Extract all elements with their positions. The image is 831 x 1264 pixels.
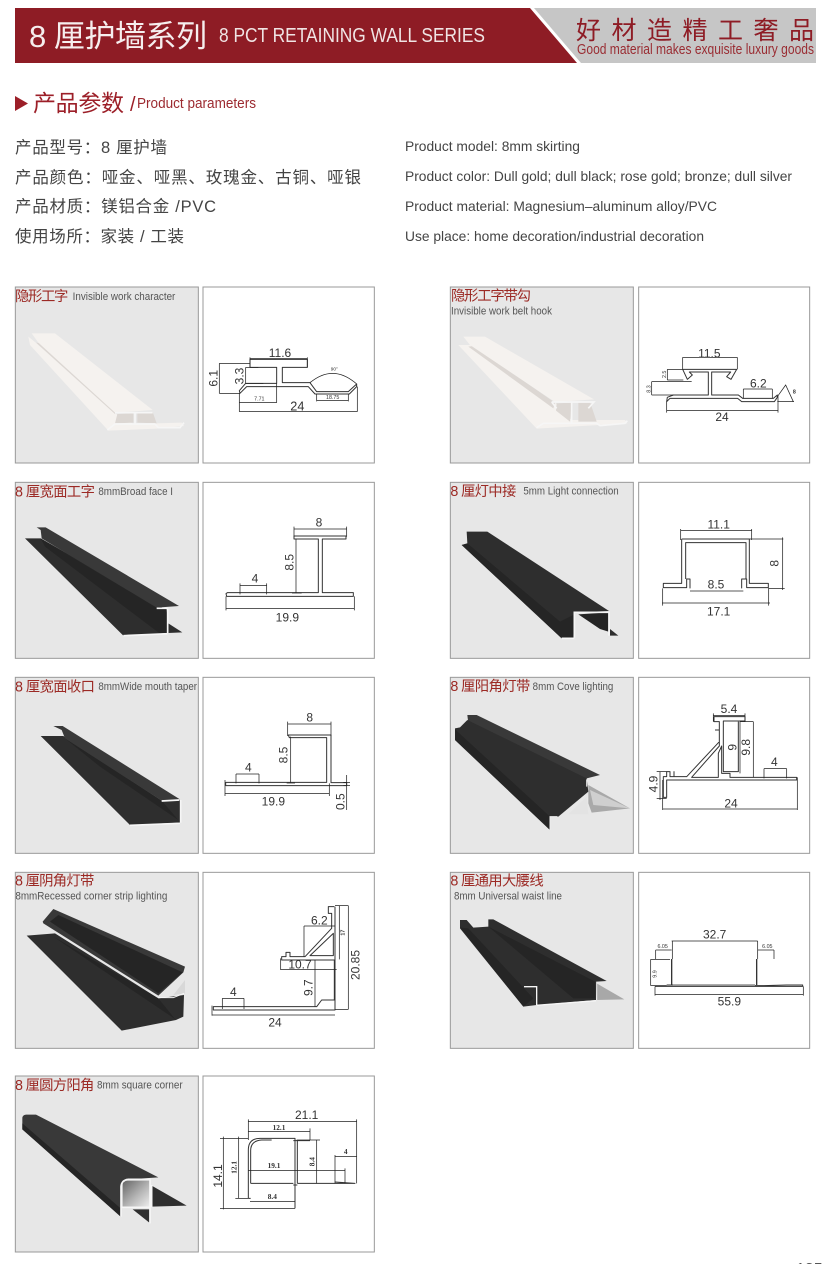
product: recessed corner strip lighting	[15, 872, 374, 1048]
technical drawing: 19.9	[262, 795, 285, 809]
photo panel: black profile: 8 厘宽面工字	[15, 483, 95, 500]
technical drawing	[639, 872, 810, 1048]
photo panel: white profile with hook	[450, 287, 633, 463]
photo panel: white profile	[15, 287, 198, 463]
technical drawing: 6.05	[762, 944, 773, 950]
technical drawing: 6.1	[206, 370, 220, 387]
photo panel: black recessed profile: 8mmRecessed corner strip lighting	[15, 891, 167, 903]
technical drawing: 6.2	[750, 376, 767, 390]
parameter list: English: Product material: Magnesium–aluminum alloy/PVC	[405, 198, 717, 214]
technical drawing: 55.9	[718, 994, 741, 1008]
technical drawing: 8.4	[268, 1192, 277, 1201]
technical drawing	[203, 1076, 374, 1252]
banner title: 8 厘护墙系列	[29, 19, 207, 54]
photo panel: black corner profile: 8 厘阳角灯带	[450, 678, 530, 695]
product: broad face I	[15, 482, 374, 658]
technical drawing: 9	[725, 744, 739, 751]
technical drawing: 5.4	[721, 702, 738, 716]
technical drawing: 18.75	[326, 395, 339, 401]
technical drawing: 8.5	[276, 746, 290, 763]
technical drawing: 24	[268, 1015, 282, 1029]
technical drawing: 8	[306, 711, 313, 725]
product: square corner	[15, 1076, 374, 1252]
technical drawing: 9.8	[739, 739, 753, 756]
technical drawing: 8.3	[646, 385, 652, 393]
technical drawing: 90°	[331, 367, 338, 372]
photo panel: black wide profile	[450, 872, 633, 1048]
technical drawing	[639, 287, 810, 463]
technical drawing: 3.3	[232, 367, 246, 384]
photo panel: black profile: 8mmWide mouth taper	[98, 681, 197, 693]
technical drawing: 7.71	[254, 397, 265, 403]
parameter list: English: Product color: Dull gold; dull black; rose gold; bronze; dull silver	[405, 168, 792, 184]
photo panel: black channel: 5mm Light connection	[523, 486, 619, 498]
technical drawing: 12.1	[273, 1123, 286, 1132]
technical drawing	[203, 287, 374, 463]
photo panel: black channel: 8 厘灯中接	[450, 483, 516, 500]
photo panel: black profile	[15, 482, 198, 658]
technical drawing: 6.2	[311, 913, 328, 927]
technical drawing: 4	[245, 761, 252, 775]
photo panel: white profile: Invisible work character	[73, 291, 176, 303]
technical drawing: 8.4	[307, 1157, 316, 1166]
technical drawing: 21.1	[295, 1108, 319, 1122]
technical drawing	[639, 677, 810, 853]
photo panel: black wide profile: 8 厘通用大腰线	[450, 872, 544, 889]
technical drawing: 4.9	[647, 775, 661, 792]
technical drawing	[203, 872, 374, 1048]
photo panel: black recessed profile	[15, 872, 198, 1048]
technical drawing	[203, 677, 374, 853]
photo panel: white profile: 隐形工字	[15, 288, 68, 305]
parameter list: English: Product model: 8mm skirting	[405, 138, 580, 154]
technical drawing: 17	[340, 930, 346, 936]
banner subtitle: 8 PCT RETAINING WALL SERIES	[219, 25, 485, 47]
product: cove lighting	[450, 677, 810, 853]
product: invisible work character	[15, 287, 374, 463]
technical drawing: 32.7	[703, 927, 727, 941]
technical drawing: 11.1	[707, 517, 730, 531]
parameter list: Chinese: 产品颜色：哑金、哑黑、玫瑰金、古铜、哑银	[15, 168, 361, 187]
technical drawing: 4	[252, 572, 259, 586]
parameter list: English	[405, 138, 792, 244]
section heading: product parameters: 产品参数	[33, 90, 124, 116]
technical drawing: 6.05	[657, 944, 668, 950]
technical drawing: 8	[316, 516, 323, 530]
technical drawing: 20.85	[349, 950, 363, 980]
photo panel: black channel	[450, 482, 633, 658]
technical drawing: 11.5	[698, 347, 721, 361]
photo panel: white profile with hook: Invisible work belt hook	[451, 306, 552, 318]
technical drawing: 2.5	[662, 371, 668, 378]
photo panel: black wide profile: 8mm Universal waist line	[454, 891, 562, 903]
technical drawing: 4	[344, 1147, 348, 1156]
technical drawing: 8	[793, 389, 796, 395]
header banner	[15, 8, 816, 63]
technical drawing: 8	[768, 560, 782, 567]
technical drawing: 11.6	[269, 346, 292, 360]
photo panel: black recessed profile: 8 厘阴角灯带	[15, 872, 94, 889]
technical drawing: 10.7	[288, 958, 312, 972]
section heading: product parameters: Product parameters	[137, 95, 256, 112]
photo panel: black profile: 8 厘宽面收口	[15, 678, 95, 695]
technical drawing	[203, 482, 374, 658]
technical drawing: 4	[230, 985, 237, 999]
technical drawing: 24	[724, 797, 738, 811]
parameter list: Chinese	[15, 138, 361, 246]
technical drawing: 19.1	[268, 1161, 281, 1170]
parameter list: Chinese: 产品型号：8 厘护墙	[15, 138, 167, 157]
photo panel: black corner profile: 8mm Cove lighting	[533, 681, 613, 693]
technical drawing: 0.5	[333, 793, 347, 810]
technical drawing: 24	[715, 410, 729, 424]
technical drawing: 14.1	[211, 1164, 225, 1188]
product: light connection	[450, 482, 810, 658]
parameter list: Chinese: 使用场所：家装 / 工装	[15, 227, 184, 246]
parameter list: English: Use place: home decoration/industrial decoration	[405, 228, 704, 244]
technical drawing: 24	[290, 400, 304, 414]
technical drawing: 8.5	[708, 578, 725, 592]
technical drawing: 19.9	[276, 610, 299, 624]
technical drawing: 12.1	[229, 1161, 238, 1174]
product: wide mouth taper	[15, 677, 374, 853]
product: invisible work belt hook	[450, 287, 810, 463]
photo panel: black profile: 8mmBroad face I	[98, 486, 173, 498]
photo panel: black profile	[15, 677, 198, 853]
banner slogan: 好材造精工奢品	[576, 17, 814, 45]
photo panel: white profile with hook: 隐形工字带勾	[451, 287, 531, 304]
section heading: product parameters	[15, 90, 256, 116]
photo panel: black square corner profile: 8 厘圆方阳角	[15, 1077, 94, 1094]
technical drawing: 4	[771, 755, 778, 769]
photo panel: black square corner profile	[15, 1076, 198, 1252]
section heading: product parameters: /	[130, 94, 136, 116]
photo panel: black corner profile	[450, 677, 633, 853]
product: universal waist line	[450, 872, 810, 1048]
parameter list: Chinese: 产品材质：镁铝合金 /PVC	[15, 197, 216, 216]
photo panel: black square corner profile: 8mm square corner	[97, 1080, 183, 1092]
technical drawing: 9.9	[653, 970, 659, 978]
technical drawing: 9.7	[302, 979, 316, 996]
technical drawing	[639, 482, 810, 658]
technical drawing: 17.1	[707, 604, 731, 618]
technical drawing: 8.5	[282, 554, 296, 571]
